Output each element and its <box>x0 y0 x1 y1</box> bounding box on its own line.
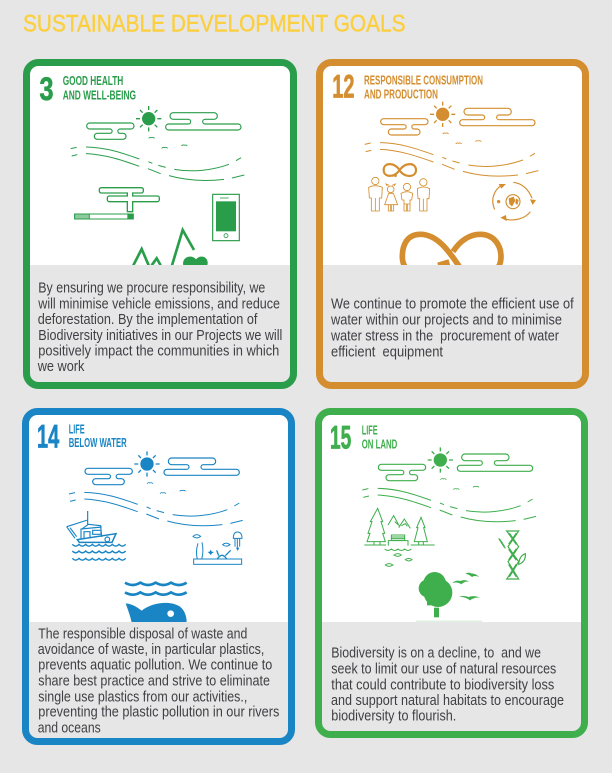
icon: large tree <box>419 572 452 617</box>
goal 14 description: prevents aquatic pollution. We continue to <box>38 658 272 674</box>
icon: seabed with marine life <box>193 532 242 564</box>
goal number 3: 3 <box>40 71 54 107</box>
goal 3 description: we work <box>37 359 85 375</box>
goal 15 heading: LIFE <box>362 423 378 437</box>
goal 14 description: single use plastics from our activities., <box>38 689 247 705</box>
landscape: sun, clouds and hills <box>365 102 538 176</box>
card border: goal 15 <box>318 412 584 734</box>
goal 3 description: Biodiversity initiatives in our Projects we will <box>38 328 282 344</box>
goal 12 description: We continue to promote the efficient use of <box>331 297 575 313</box>
illustration: goal 14 scene <box>67 451 243 622</box>
icon: mountains and heart <box>133 230 208 265</box>
goal 14 description: The responsible disposal of waste and <box>38 627 247 643</box>
goal 14 heading: LIFE <box>69 423 85 437</box>
goal 14 description: preventing the plastic pollution in our rivers <box>38 705 279 721</box>
icon: large infinity loop <box>402 234 501 272</box>
illustration: goal 3 scene <box>71 106 244 265</box>
icon: flying birds <box>452 573 480 600</box>
goal 15 description: that could contribute to biodiversity loss <box>331 678 554 694</box>
goal 14 description: and oceans <box>38 721 101 737</box>
illustration: goal 15 scene <box>362 447 536 622</box>
goal 12 description: efficient equipment <box>331 344 443 360</box>
goal number 12: 12 <box>332 69 354 105</box>
gray text area <box>30 265 290 385</box>
card border: goal 14 <box>26 412 292 742</box>
icon: recycling cycle with globe <box>493 182 536 221</box>
icon: smoke and cigarette <box>75 188 159 219</box>
goal 12 description <box>330 297 575 360</box>
goal 15 description: biodiversity to flourish. <box>331 708 456 724</box>
goal 12 description: water within our projects and to minimise <box>330 313 562 329</box>
goal 15 description: and support natural habitats to encourage <box>331 693 564 709</box>
illustration: goal 12 scene <box>365 102 538 272</box>
icon: fish <box>126 603 187 622</box>
icon: fishing boat on waves <box>67 511 126 560</box>
goal 3 description: By ensuring we procure responsibility, we <box>38 281 265 297</box>
goal 3 description <box>37 281 282 375</box>
goal 15 description: Biodiversity is on a decline, to and we <box>331 646 541 662</box>
goal number 15: 15 <box>330 419 351 455</box>
goal 15 description: seek to limit our use of natural resources <box>331 662 556 678</box>
goal 15 heading <box>362 423 397 451</box>
goal 14 description: share best practice and strive to eliminate <box>38 674 270 690</box>
card border: goal 12 <box>320 62 586 386</box>
goal 12 heading <box>364 73 483 101</box>
goal 3 description: positively impact the communities in which <box>38 344 279 360</box>
goal 14 description: avoidance of waste, in particular plastics, <box>38 642 264 658</box>
icon: forest, mountains and bench <box>364 508 435 566</box>
icon: smartphone <box>213 194 239 241</box>
goal 3 heading: AND WELL-BEING <box>63 88 136 102</box>
ground strip <box>416 621 482 622</box>
goal 3 description: will minimise vehicle emissions, and reduce <box>37 296 280 312</box>
goal 14 heading <box>69 423 127 450</box>
icon: small infinity loop <box>384 164 416 177</box>
goal 12 heading: AND PRODUCTION <box>364 87 438 101</box>
goal 15 heading: ON LAND <box>362 437 397 451</box>
card border: goal 3 <box>26 62 294 386</box>
landscape: sun, clouds and hills <box>71 106 244 180</box>
landscape: sun, clouds and hills <box>362 447 536 522</box>
landscape: sun, clouds and hills <box>69 451 243 526</box>
goal 3 heading <box>63 74 136 102</box>
gray text area <box>322 622 581 735</box>
panel: goal 15 life on land <box>318 412 584 735</box>
panel: goal 3 good health <box>26 62 294 386</box>
goal 14 description <box>38 627 279 737</box>
goal 3 description: deforestation. By the implementation of <box>38 312 258 328</box>
icon: thick waves <box>125 583 187 595</box>
goal 15 description <box>331 646 564 724</box>
panel: goal 12 responsible consumption <box>320 62 586 386</box>
gray text area <box>29 622 288 742</box>
icon: DNA strand with leaf and wheat <box>499 531 525 579</box>
goal 12 description: water stress in the procurement of water <box>330 328 559 344</box>
panel: goal 14 life below water <box>26 412 292 742</box>
gray text area <box>323 265 582 385</box>
title: SUSTAINABLE DEVELOPMENT GOALS <box>23 12 406 38</box>
goal 3 heading: GOOD HEALTH <box>63 74 123 88</box>
goal number 14: 14 <box>37 418 59 454</box>
goal 12 heading: RESPONSIBLE CONSUMPTION <box>364 73 483 87</box>
goal 14 heading: BELOW WATER <box>69 436 127 450</box>
icon: family of four <box>369 177 430 211</box>
